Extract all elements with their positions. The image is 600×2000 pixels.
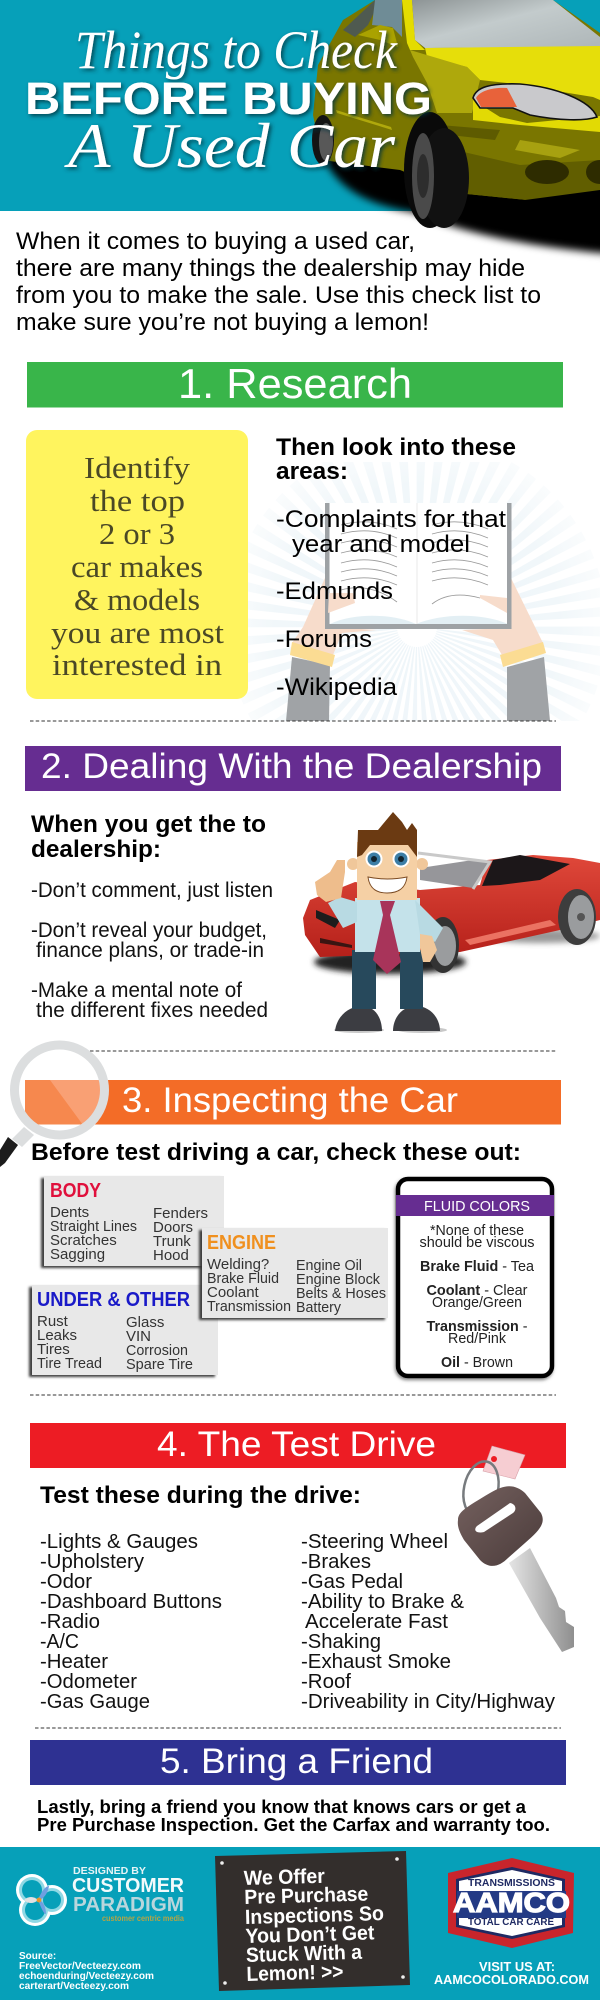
panel: body checklist: Doors [153,1219,193,1236]
dealership list: the different fixes needed [36,999,268,1022]
logo: AAMCO badge: TRANSMISSIONS [468,1877,555,1889]
logo: AAMCO badge: TOTAL CAR CARE [468,1916,554,1928]
closing text: Lastly, bring a friend you know that knows cars or get a [37,1796,527,1817]
panel: under and other checklist: Leaks [37,1327,77,1344]
panel: under and other checklist: VIN [126,1328,151,1345]
header banner [0,0,600,254]
closing text [37,1796,550,1835]
panel: body checklist [44,1176,224,1266]
test drive subheading: Test these during the drive: [40,1482,361,1509]
panel: identify car makes: interested in [52,647,223,682]
callout: pre purchase sign: We Offer [243,1865,325,1890]
panel: fluid colors: Coolant - Clear [426,1282,528,1299]
footer [0,1847,600,2000]
panel: fluid colors: Brake Fluid - Tea [420,1258,535,1275]
panel: under and other checklist: Glass [126,1314,164,1331]
research list: -Edmunds [276,578,393,605]
source credits [19,1951,154,1992]
test drive list left: -Radio [40,1610,100,1633]
research list: year and model [292,531,470,558]
section 4 heading: Test Drive [30,1423,566,1468]
test drive list left: -Odometer [40,1670,137,1693]
panel: engine checklist: Brake Fluid [207,1270,279,1287]
logo: AAMCO badge [448,1858,574,1948]
panel: fluid colors: *None of these [430,1222,524,1239]
callout: pre purchase sign [215,1851,410,1991]
section 2 heading: Dealership: 2. Dealing With the Dealership [41,747,542,786]
panel: body checklist: Trunk [153,1233,191,1250]
panel: under and other checklist: Corrosion [126,1342,188,1359]
illustration: book with hands and rays [286,503,550,732]
test drive list left: -Heater [40,1650,108,1673]
arms [328,897,443,942]
dealership list [31,811,273,1022]
callout: pre purchase sign: Stuck With a [246,1941,363,1967]
logo text: CUSTOMER [72,1875,185,1897]
section 4 heading: Test Drive: 4. The Test Drive [157,1425,436,1464]
callout: pre purchase sign: You Don’t Get [245,1921,375,1948]
title: A Used Car [64,111,396,181]
closing text: Pre Purchase Inspection. Get the Carfax and warranty too. [37,1814,550,1835]
panel: identify car makes [26,430,248,699]
panel: under and other checklist: UNDER & OTHER [37,1289,191,1311]
panel: body checklist: BODY [50,1180,102,1202]
icon: magnifying glass [0,1045,115,1167]
test drive list right: -Driveability in City/Highway [301,1690,556,1713]
panel: under and other checklist: Tires [37,1341,70,1358]
section 1 heading: Research [27,360,563,408]
section 5 heading: Friend [30,1740,566,1785]
shoes [334,1006,447,1033]
panel: under and other checklist [32,1285,218,1375]
section 1 heading: Research: 1. Research [178,360,412,407]
panel: engine checklist: Coolant [207,1284,260,1301]
dealership list: -Don’t comment, just listen [31,879,273,902]
research list: -Forums [276,626,372,653]
panel: body checklist: Scratches [50,1232,117,1249]
panel: engine checklist: Battery [296,1299,341,1316]
dealership list: finance plans, or trade-in [36,939,264,962]
panel: fluid colors: should be viscous [420,1234,534,1251]
dealership list: -Make a mental note of [31,979,242,1002]
panel: body checklist: Sagging [50,1246,105,1263]
necktie [373,901,401,974]
illustration: salesman [315,812,447,1033]
panel: engine checklist: Welding? [207,1256,269,1273]
head [347,812,428,900]
dealership list: -Don’t reveal your budget, [31,919,267,942]
subheading: Before test driving a car, check these out: [31,1139,521,1166]
panel: fluid colors [396,1179,554,1376]
test drive list left: -Gas Gauge [40,1690,150,1713]
panel: identify car makes: you are most [51,615,224,650]
illustration: red car [303,853,600,974]
test drive list right: -Gas Pedal [301,1570,403,1593]
research list: Then look into these [276,434,516,461]
website link text [434,1959,589,1987]
panel: engine checklist: Transmission [207,1298,291,1315]
icon: car key [458,1446,574,1652]
panel: fluid colors: Oil - Brown [441,1354,513,1371]
test drive list right: -Shaking [301,1630,381,1653]
panel: engine checklist: Engine Oil [296,1257,362,1274]
test drive list right: Accelerate Fast [305,1610,448,1633]
trousers [352,950,423,1009]
logo: AAMCO badge: AAMCO [453,1887,570,1918]
panel: identify car makes: car makes [71,549,203,584]
website link text: AAMCOCOLORADO.COM [434,1972,589,1987]
panel: engine checklist: Belts & Hoses [296,1285,386,1302]
test drive list left [40,1530,222,1713]
section 5 heading: Friend: 5. Bring a Friend [160,1742,433,1781]
test drive list right: -Ability to Brake & [301,1590,464,1613]
panel: identify car makes: Identify [84,450,191,485]
intro text: make sure you’re not buying a lemon! [16,309,429,336]
website link text: VISIT US AT: [479,1959,555,1974]
logo text: DESIGNED BY [73,1865,146,1877]
section 3 heading: Inspecting [25,1080,561,1124]
panel: identify car makes: the top [90,483,185,518]
research list: -Complaints for that [276,506,506,533]
icon: headlight [473,84,597,120]
callout: pre purchase sign: Pre Purchase [244,1883,369,1909]
intro text: there are many things the dealership may hide [16,255,525,282]
panel: identify car makes: & models [74,582,200,617]
logo: customer paradigm mark [16,1874,67,1926]
panel: under and other checklist: Spare Tire [126,1356,193,1373]
other hand [420,934,437,962]
panel: engine checklist [202,1228,388,1318]
front wheel [404,112,469,228]
title [25,20,432,181]
test drive list right: -Steering Wheel [301,1530,448,1553]
test drive list right: -Roof [301,1670,351,1693]
test drive list right: -Brakes [301,1550,371,1573]
research list: -Wikipedia [276,674,398,701]
source credits: echoenduring/Vecteezy.com [19,1971,154,1982]
source credits: FreeVector/Vecteezy.com [19,1961,141,1972]
test drive list left: -Odor [40,1570,92,1593]
callout: pre purchase sign: Inspections So [245,1902,384,1929]
logo text [72,1865,185,1923]
panel: body checklist: Dents [50,1204,89,1221]
panel: fluid colors: Orange/Green [432,1294,522,1311]
test drive list left: -Lights & Gauges [40,1530,198,1553]
intro text: When it comes to buying a used car, [16,228,415,255]
source credits: Source: [19,1951,56,1962]
dealership list: dealership: [31,836,161,863]
test drive list right: -Exhaust Smoke [301,1650,451,1673]
title: Things to Check [75,20,398,80]
panel: engine checklist: ENGINE [207,1232,276,1254]
research list: areas: [276,458,348,485]
panel: fluid colors: Transmission - [426,1318,528,1335]
research list [276,434,516,701]
panel: under and other checklist: Tire Tread [37,1355,102,1372]
test drive list right [301,1530,556,1713]
panel: fluid colors: Red/Pink [448,1330,506,1347]
test drive list left: -A/C [40,1630,79,1653]
panel: body checklist: Hood [153,1247,189,1264]
shirt [355,898,420,952]
panel: engine checklist: Engine Block [296,1271,380,1288]
callout: pre purchase sign: Lemon! >> [246,1960,344,1986]
thumbs up hand [315,860,345,902]
car shadow [320,150,600,254]
title: BEFORE BUYING [25,73,432,124]
intro text: from you to make the sale. Use this check list to [16,282,541,309]
panel: body checklist: Fenders [153,1205,208,1222]
panel: fluid colors: FLUID COLORS [424,1198,530,1215]
icon: yellow car [312,0,600,228]
logo text: PARADIGM [73,1894,184,1916]
logo text: customer centric media [102,1913,184,1923]
test drive list left: -Upholstery [40,1550,145,1573]
test drive list left: -Dashboard Buttons [40,1590,222,1613]
intro text [16,228,541,336]
panel: body checklist: Straight Lines [50,1218,137,1235]
source credits: carterart/Vecteezy.com [19,1981,129,1992]
panel: under and other checklist: Rust [37,1313,69,1330]
panel: identify car makes: 2 or 3 [99,516,175,551]
section 3 heading: Inspecting: 3. Inspecting the Car [122,1081,458,1120]
dealership list: When you get the to [31,811,266,838]
